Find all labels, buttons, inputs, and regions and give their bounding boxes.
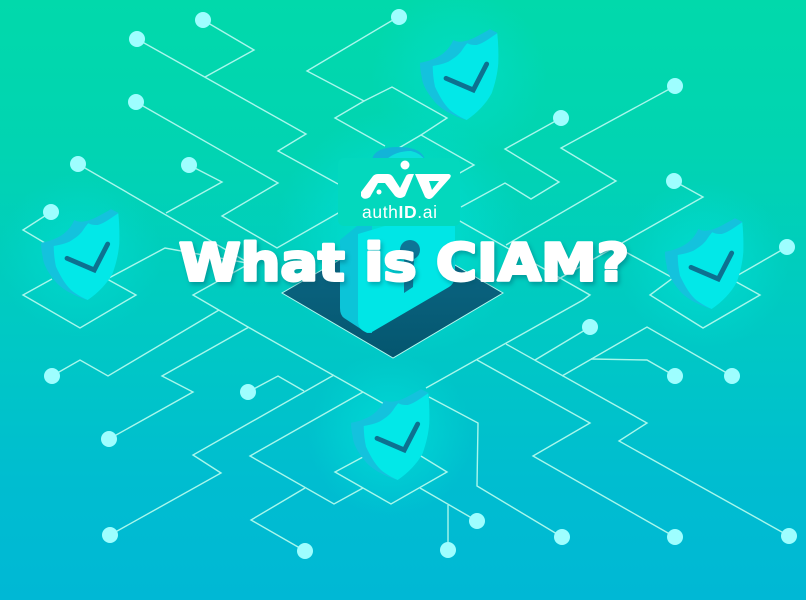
- logo panel: [338, 158, 460, 226]
- padlock keyhole: [400, 240, 420, 293]
- title: What is CIAM?: [179, 234, 629, 294]
- logo wordmark: authID.ai: [362, 202, 437, 222]
- lock pit platform: [282, 229, 503, 358]
- padlock side face: [340, 226, 372, 333]
- shield: left: [41, 209, 119, 300]
- shield: bottom: [351, 389, 429, 480]
- shield: right: [665, 218, 743, 309]
- padlock shackle highlight: [386, 151, 425, 160]
- padlock front face: [358, 226, 455, 333]
- padlock: [340, 147, 455, 333]
- padlock shackle: [372, 147, 425, 160]
- shield: top: [420, 29, 498, 120]
- logo mark: [361, 160, 451, 199]
